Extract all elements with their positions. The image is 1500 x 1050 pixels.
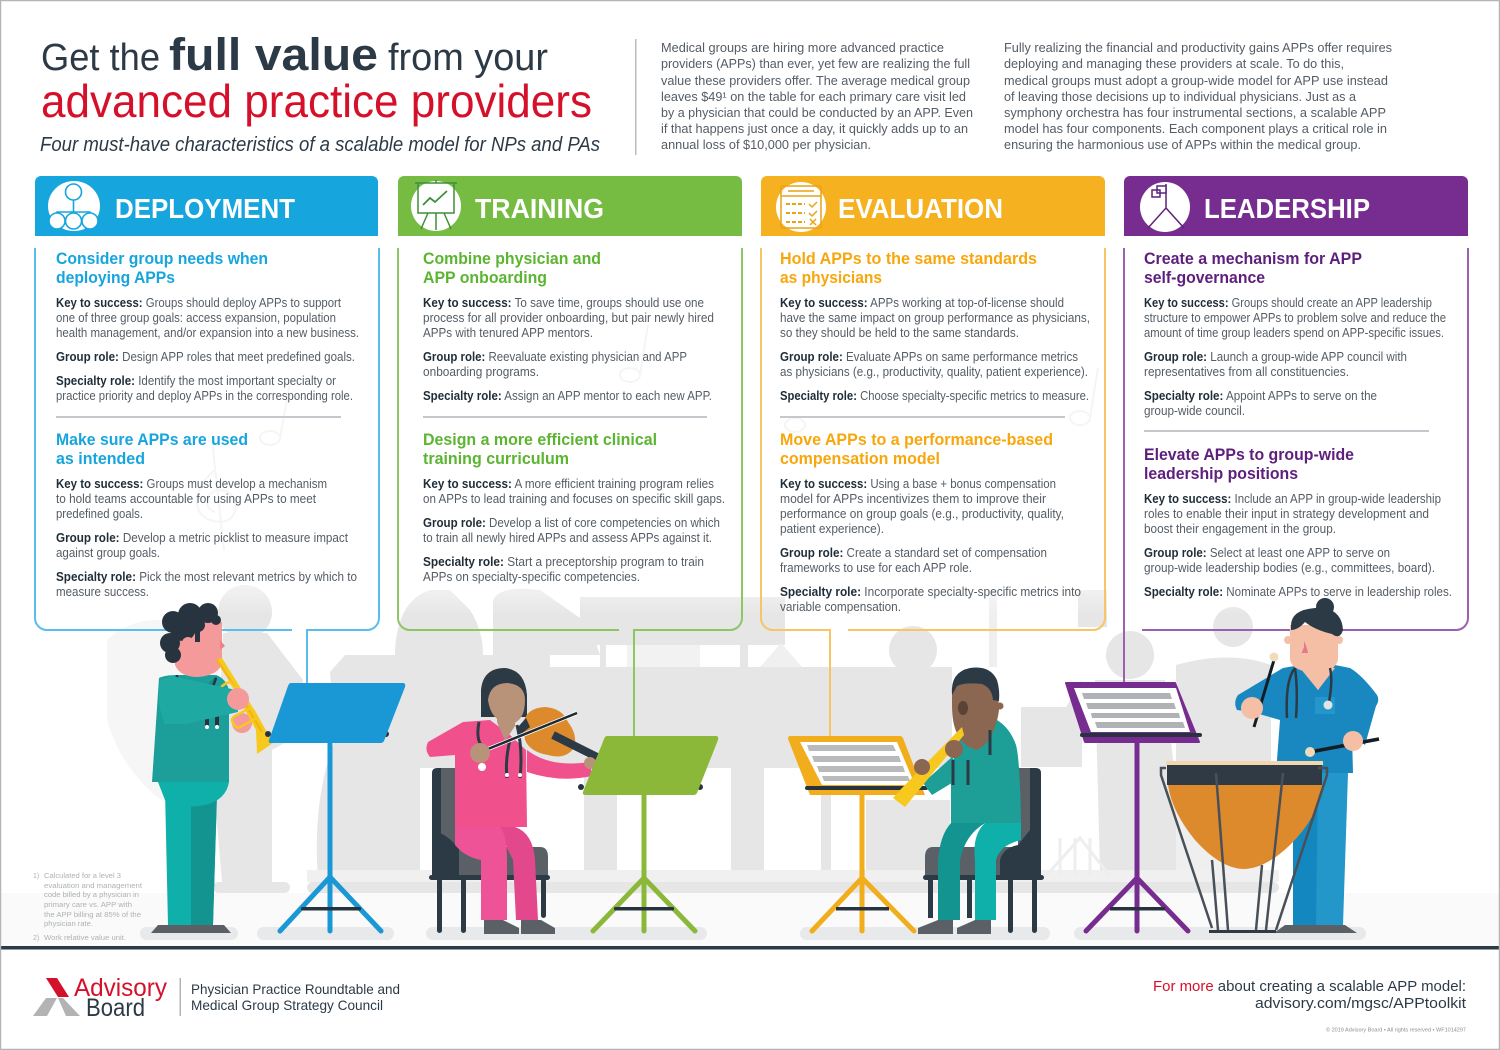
- footnotes: Work relative value unit.: [44, 935, 126, 942]
- timpani drum: [1161, 761, 1327, 933]
- text: performance-based compensation: Specialty role: Incorporate specialty-specific metrics into: [780, 585, 1081, 599]
- deployment panel outline and connector: [35, 248, 379, 683]
- text: same standards: Specialty role: Choose specialty-specific metrics to measure.: [780, 389, 1089, 403]
- logo: Advisory Board: Board: [86, 994, 145, 1022]
- text: performance-based compensation: Group role: Create a standard set of compensation: [780, 546, 1047, 560]
- text: efficient curriculum: APPs on specialty-specific competencies.: [423, 570, 640, 584]
- intro paragraph 1: by a physician that could be conducted by an APP. Even: [661, 105, 973, 120]
- text: efficient curriculum: Key to success: A more efficient training program relies: [423, 477, 714, 491]
- text: performance-based compensation: model for APPs incentivizes them to improve their: [780, 492, 1046, 506]
- text: efficient curriculum: [423, 477, 725, 584]
- text: efficient curriculum: Group role: Develop a list of core competencies on which: [423, 516, 720, 530]
- text: combine physician: [423, 296, 714, 403]
- heading: self-governance: [1144, 250, 1362, 287]
- heading: efficient curriculum: Design a more efficient clinical: [423, 431, 657, 449]
- deployment header bar: [35, 176, 378, 236]
- heading: efficient curriculum: [423, 431, 657, 468]
- intro paragraph 2: medical groups must adopt a group-wide model for APP use instead: [1004, 73, 1388, 88]
- heading: consider group needs: deploying APPs: [56, 269, 175, 287]
- intro paragraph 1: Medical groups are hiring more advanced practice: [661, 40, 944, 55]
- text: same standards: have the same impact on group performance as physicians,: [780, 311, 1090, 325]
- text: consider group needs: Key to success: Groups should deploy APPs to support: [56, 296, 341, 310]
- footnotes: physician rate.: [44, 921, 93, 928]
- call to action: advisory.com/mgsc/APPtoolkit: [1255, 995, 1467, 1012]
- figure: trumpet player: [151, 603, 273, 933]
- text: self-governance: [1144, 296, 1446, 418]
- heading: consider group needs: [56, 250, 268, 287]
- icon: presentation easel: [411, 180, 461, 231]
- text: group-wide leadership: Group role: Select at least one APP to serve on: [1144, 546, 1390, 560]
- text: make sure APPs are used: to hold teams accountable for using APPs to meet: [56, 492, 316, 506]
- heading: make sure APPs are used: as intended: [56, 450, 145, 468]
- stand: green: [578, 736, 718, 931]
- leadership label: LEADERSHIP: [1204, 193, 1370, 224]
- text: efficient curriculum: Specialty role: Start a preceptorship program to train: [423, 555, 704, 569]
- logo: Advisory Board: [33, 974, 167, 1022]
- text: combine physician: Group role: Reevaluate existing physician and APP: [423, 350, 687, 364]
- chair: [429, 768, 550, 933]
- intro paragraph 2: Fully realizing the financial and productivity gains APPs offer requires: [1004, 40, 1392, 55]
- call to action: [1153, 978, 1467, 1012]
- evaluation label: EVALUATION: [838, 193, 1003, 224]
- icon: conductor flag on stand: [1140, 182, 1190, 232]
- title: full value: [169, 29, 378, 80]
- intro paragraph 2: model has four components. Each component plays a critical role in: [1004, 121, 1387, 136]
- text: consider group needs: Specialty role: Identify the most important specialty or: [56, 374, 336, 388]
- footnotes: the APP billing at 85% of the: [44, 912, 141, 919]
- heading: same standards: as physicians: [780, 269, 882, 287]
- text: consider group needs: health management, and/or expansion into a new business.: [56, 326, 359, 340]
- text: make sure APPs are used: Key to success: Groups must develop a mechanism: [56, 477, 327, 491]
- footnotes: code billed by a physician in: [44, 892, 139, 899]
- evaluation panel outline and connector: [761, 248, 1105, 736]
- text: consider group needs: one of three group goals: access expansion, population: [56, 311, 336, 325]
- panel: deployment: [35, 176, 379, 683]
- text: combine physician: APPs with tenured APP mentors.: [423, 326, 593, 340]
- footnotes: 2): [33, 935, 39, 942]
- heading: same standards: [780, 250, 1037, 287]
- text: self-governance: representatives from all constituencies.: [1144, 365, 1349, 379]
- text: self-governance: group-wide council.: [1144, 404, 1245, 418]
- text: group-wide leadership: Key to success: Include an APP in group-wide leadership: [1144, 492, 1441, 506]
- stand: purple with sheet music: [1066, 683, 1202, 931]
- text: self-governance: Specialty role: Appoint APPs to serve on the: [1144, 389, 1377, 403]
- logo: Advisory Board: Advisory: [74, 974, 167, 1002]
- violin: [523, 707, 575, 756]
- text: same standards: [780, 296, 1090, 403]
- footnotes: Calculated for a level 3: [44, 873, 121, 880]
- footnotes: [33, 873, 142, 942]
- text: make sure APPs are used: [56, 477, 357, 599]
- call to action: For more about creating a scalable APP model:: [1153, 978, 1466, 995]
- text: group-wide leadership: Specialty role: Nominate APPs to serve in leadership roles.: [1144, 585, 1452, 599]
- training header bar: [398, 176, 742, 236]
- text: efficient curriculum: on APPs to lead training and focuses on specific skill gaps.: [423, 492, 725, 506]
- training label: TRAINING: [475, 193, 604, 224]
- organization name: Medical Group Strategy Council: [191, 997, 383, 1013]
- figure: timpanist: [1161, 598, 1379, 933]
- text: consider group needs: practice priority and deploy APPs in the corresponding role.: [56, 389, 353, 403]
- intro paragraph 1: leaves $49¹ on the table for each primary care visit led: [661, 89, 966, 104]
- heading: same standards: Hold APPs to the same standards: [780, 250, 1037, 268]
- intro paragraph 2: symphony orchestra has four instrumental sections, a scalable APP: [1004, 105, 1386, 120]
- heading: group-wide leadership: leadership positions: [1144, 465, 1298, 483]
- footnotes: primary care vs. APP with: [44, 902, 132, 909]
- evaluation header bar: [761, 176, 1105, 236]
- text: group-wide leadership: group-wide leadership bodies (e.g., committees, board).: [1144, 561, 1435, 575]
- intro paragraph 1: value these providers offer. The average medical group: [661, 73, 970, 88]
- text: group-wide leadership: roles to enable their input in strategy development and: [1144, 507, 1429, 521]
- text: combine physician: onboarding programs.: [423, 365, 539, 379]
- text: same standards: Group role: Evaluate APPs on same performance metrics: [780, 350, 1078, 364]
- text: same standards: as physicians (e.g., productivity, quality, patient experience).: [780, 365, 1088, 379]
- heading: performance-based compensation: compensation model: [780, 450, 940, 468]
- background: faint music notes behind the panels: [197, 325, 1098, 550]
- heading: group-wide leadership: [1144, 446, 1354, 483]
- text: performance-based compensation: [780, 477, 1081, 614]
- text: self-governance: structure to empower APPs to problem solve and reduce the: [1144, 311, 1446, 325]
- text: self-governance: amount of time group leaders spend on APP-specific issues.: [1144, 326, 1444, 340]
- heading: self-governance: Create a mechanism for APP: [1144, 250, 1362, 268]
- training panel outline and connector: [398, 248, 742, 736]
- text: performance-based compensation: frameworks to use for each APP role.: [780, 561, 972, 575]
- footnotes: 1): [33, 873, 39, 880]
- intro paragraph 1: [661, 40, 973, 152]
- copyright: © 2019 Advisory Board • All rights reserved • WF1014297: [1326, 1026, 1466, 1034]
- figure: violinist: [426, 668, 597, 934]
- heading: self-governance: self-governance: [1144, 269, 1265, 287]
- intro paragraph 2: ensuring the harmonious use of APPs within the medical group.: [1004, 137, 1361, 152]
- text: self-governance: Key to success: Groups should create an APP leadership: [1144, 296, 1432, 310]
- heading: performance-based compensation: [780, 431, 1053, 468]
- text: same standards: Key to success: APPs working at top-of-license should: [780, 296, 1064, 310]
- heading: make sure APPs are used: Make sure APPs are used: [56, 431, 248, 449]
- text: make sure APPs are used: predefined goals.: [56, 507, 143, 521]
- heading: performance-based compensation: Move APPs to a performance-based: [780, 431, 1053, 449]
- text: combine physician: Key to success: To save time, groups should use one: [423, 296, 704, 310]
- intro paragraph 2: [1004, 40, 1392, 152]
- heading: group-wide leadership: Elevate APPs to group-wide: [1144, 446, 1354, 464]
- icon: checklist: [776, 182, 826, 232]
- chair: [923, 768, 1044, 933]
- heading: combine physician: Combine physician and: [423, 250, 601, 268]
- text: performance-based compensation: Key to success: Using a base + bonus compensation: [780, 477, 1056, 491]
- title: from your: [388, 37, 548, 79]
- text: group-wide leadership: [1144, 492, 1452, 599]
- intro paragraph 1: providers (APPs) than ever, yet few are realizing the full: [661, 56, 970, 71]
- heading: make sure APPs are used: [56, 431, 248, 468]
- deployment label: DEPLOYMENT: [115, 193, 295, 224]
- figure: flutist: [893, 668, 1044, 934]
- intro paragraph 2: of leaving those decisions up to individual physicians. Just as a: [1004, 89, 1357, 104]
- text: consider group needs: Group role: Design APP roles that meet predefined goals.: [56, 350, 355, 364]
- text: performance-based compensation: performance on group goals (e.g., productivity, quality,: [780, 507, 1064, 521]
- text: group-wide leadership: boost their engagement in the group.: [1144, 522, 1336, 536]
- floor shadows: [140, 927, 1366, 940]
- leadership header bar: [1124, 176, 1468, 236]
- text: consider group needs: [56, 296, 359, 403]
- intro paragraph 1: annual loss of $10,000 per physician.: [661, 137, 871, 152]
- title: advanced practice providers: [41, 75, 592, 127]
- organization name: [191, 981, 400, 1013]
- text: combine physician: Specialty role: Assign an APP mentor to each new APP.: [423, 389, 712, 403]
- stand: blue: [265, 683, 405, 931]
- background: orchestra silhouettes: [107, 585, 1279, 893]
- text: make sure APPs are used: Specialty role: Pick the most relevant metrics by which to: [56, 570, 357, 584]
- icon: org chart: [48, 181, 100, 231]
- heading: combine physician: APP onboarding: [423, 269, 547, 287]
- title: [41, 29, 592, 127]
- intro paragraph 2: deploying and managing these providers at scale. To do this,: [1004, 56, 1344, 71]
- heading: combine physician: [423, 250, 601, 287]
- heading: efficient curriculum: training curriculum: [423, 450, 569, 468]
- text: make sure APPs are used: Group role: Develop a metric picklist to measure impact: [56, 531, 348, 545]
- text: performance-based compensation: variable compensation.: [780, 600, 901, 614]
- heading: consider group needs: Consider group needs when: [56, 250, 268, 268]
- subtitle: Four must-have characteristics of a scalable model for NPs and PAs: [40, 134, 600, 156]
- text: make sure APPs are used: measure success.: [56, 585, 149, 599]
- text: same standards: so they should be held to the same standards.: [780, 326, 1019, 340]
- title: Get the: [41, 37, 160, 79]
- text: performance-based compensation: patient experience).: [780, 522, 884, 536]
- organization name: Physician Practice Roundtable and: [191, 981, 400, 997]
- panel: training: [398, 176, 742, 736]
- leadership panel outline and connector: [1124, 248, 1468, 683]
- text: combine physician: process for all provider onboarding, but pair newly hired: [423, 311, 714, 325]
- stand: gold with sheet music: [788, 736, 928, 931]
- panel: leadership: [1124, 176, 1468, 683]
- text: efficient curriculum: to train all newly hired APPs and assess APPs against it.: [423, 531, 712, 545]
- panel: evaluation: [761, 176, 1105, 736]
- intro paragraph 1: if that happens just once a day, it quickly adds up to an: [661, 121, 968, 136]
- text: make sure APPs are used: against group goals.: [56, 546, 160, 560]
- text: self-governance: Group role: Launch a group-wide APP council with: [1144, 350, 1407, 364]
- footnotes: evaluation and management: [44, 883, 142, 890]
